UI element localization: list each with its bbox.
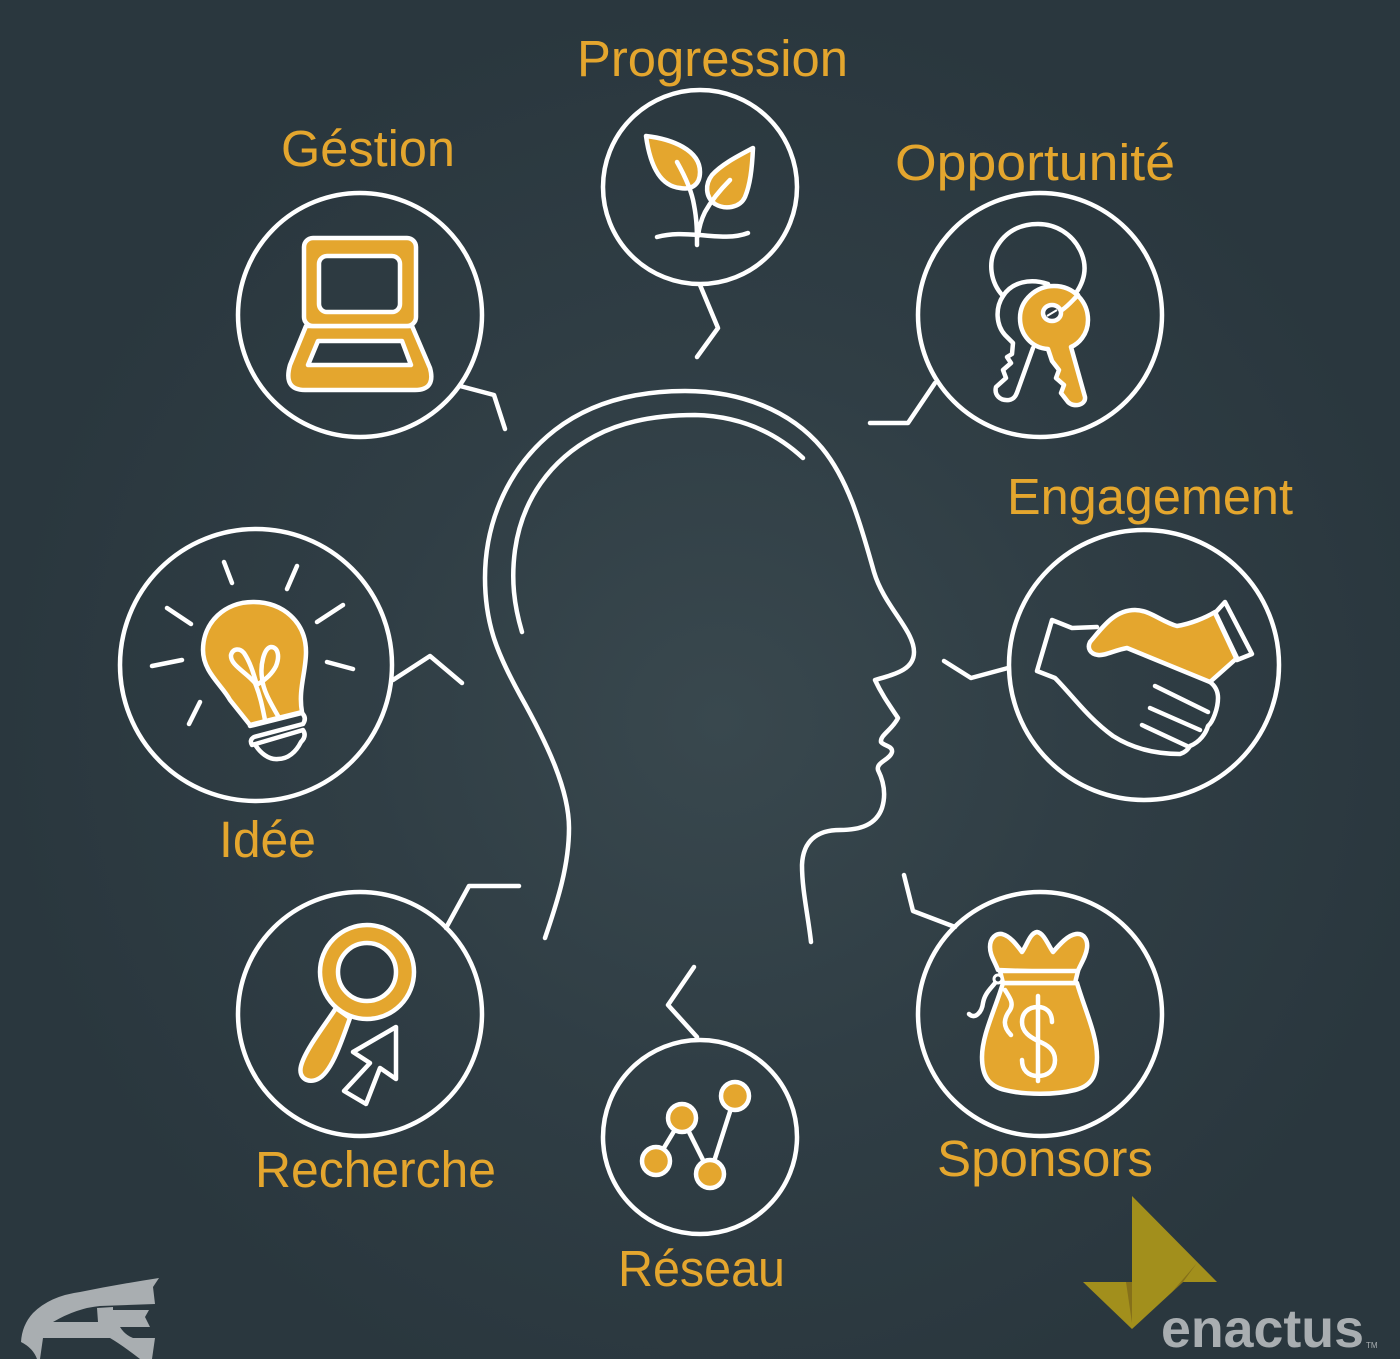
icon: network line <box>642 1082 749 1188</box>
circle: opportunite <box>918 193 1162 437</box>
logo wordmark: enactus <box>1161 1299 1364 1359</box>
circle: reseau <box>603 1040 797 1234</box>
icon: lightbulb <box>152 562 353 759</box>
connector: recherche <box>446 886 519 928</box>
icon: keys <box>991 224 1088 405</box>
panel: sponsors <box>918 892 1162 1187</box>
icon: magnifier and cursor <box>300 925 414 1104</box>
head silhouette <box>485 391 914 942</box>
panel: reseau <box>603 1040 797 1297</box>
heading: gestion: Géstion <box>281 120 455 177</box>
panel: gestion <box>238 120 482 437</box>
heading: idee: Idée <box>219 811 316 868</box>
connector: reseau <box>668 967 697 1037</box>
circle: recherche <box>238 892 482 1136</box>
connector: opportunite <box>870 383 935 423</box>
connector: progression <box>697 285 718 357</box>
heading: opportunite: Opportunité <box>895 134 1175 191</box>
heading: recherche: Recherche <box>255 1141 496 1198</box>
panel: engagement <box>1007 468 1293 800</box>
panel: idee <box>120 529 392 868</box>
logo: left emblem <box>21 1278 159 1359</box>
heading: engagement: Engagement <box>1007 468 1293 525</box>
icon: laptop <box>288 238 431 390</box>
connector: idee <box>393 656 462 683</box>
panel: progression <box>577 30 848 284</box>
connector: sponsors <box>904 875 955 927</box>
heading: reseau: Réseau <box>618 1240 785 1297</box>
heading: progression: Progression <box>577 30 848 87</box>
panel: recherche <box>238 892 496 1198</box>
circle: idee <box>120 529 392 801</box>
icon: plant <box>646 136 753 245</box>
panel: opportunite <box>895 134 1175 437</box>
circle: engagement <box>1009 530 1279 800</box>
logo mark <box>1083 1196 1217 1329</box>
circle: progression <box>603 90 797 284</box>
circle: gestion <box>238 193 482 437</box>
icon: handshake <box>1037 602 1252 754</box>
trademark: TM <box>1366 1341 1378 1350</box>
circle: sponsors <box>918 892 1162 1136</box>
icon: money bag <box>969 932 1097 1094</box>
connector: gestion <box>460 386 505 429</box>
logo: enactus <box>1083 1196 1378 1359</box>
heading: sponsors: Sponsors <box>937 1130 1153 1187</box>
connector: engagement <box>944 661 1008 678</box>
